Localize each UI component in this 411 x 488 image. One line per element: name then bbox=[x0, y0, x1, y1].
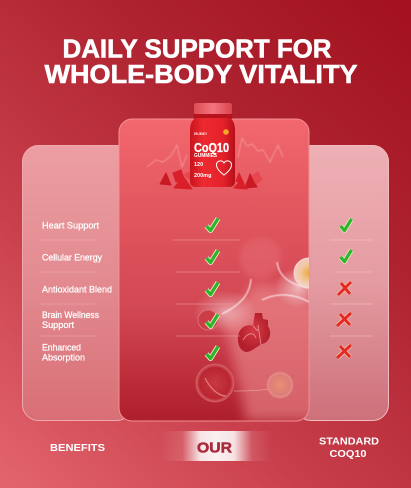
gummies right bbox=[234, 172, 262, 189]
orb: small near check bbox=[198, 310, 218, 330]
dosage: 200mg bbox=[194, 173, 211, 179]
heartbeat line left bbox=[147, 145, 187, 167]
human body illustration bbox=[196, 239, 309, 420]
benefit labels: Support bbox=[42, 320, 74, 330]
orb: lower right bbox=[267, 372, 293, 398]
cross row 4 bbox=[337, 313, 351, 326]
title bbox=[44, 34, 358, 89]
title: DAILY SUPPORT FOR bbox=[62, 34, 332, 64]
orb: upper right bbox=[294, 258, 309, 288]
check row 2 bbox=[340, 250, 352, 262]
orb: large lower bbox=[196, 364, 234, 402]
center dividers bbox=[172, 240, 240, 336]
connector line bbox=[234, 389, 268, 391]
highlight band: our bbox=[160, 431, 272, 461]
panel: standard CoQ10 column bbox=[295, 146, 388, 420]
count: 120 bbox=[194, 162, 203, 168]
benefit labels: Brain Wellness bbox=[42, 310, 99, 320]
cross row 3 bbox=[338, 282, 351, 295]
column label: standard coq10 bbox=[319, 436, 379, 460]
heart icon bbox=[216, 161, 232, 175]
check row 5 bbox=[206, 346, 218, 358]
standard column marks bbox=[337, 219, 352, 358]
benefit labels: Heart Support bbox=[42, 220, 100, 230]
check row 1 bbox=[340, 219, 352, 230]
column label: standard coq10: STANDARD bbox=[319, 436, 379, 448]
benefit labels: Antioxidant Blend bbox=[42, 284, 112, 294]
check row 4 bbox=[206, 314, 218, 326]
shoulder glow right bbox=[276, 270, 309, 306]
check row 1 bbox=[206, 218, 218, 230]
torso bbox=[222, 285, 320, 421]
glowing neck and collar lines bbox=[222, 262, 309, 314]
column label: our: OUR bbox=[197, 440, 232, 456]
right dividers bbox=[330, 240, 373, 336]
gummies left bbox=[160, 170, 192, 189]
column label: benefits: BENEFITS bbox=[50, 442, 105, 454]
column label: standard coq10: COQ10 bbox=[330, 448, 367, 460]
left dividers bbox=[40, 240, 96, 336]
chest glow left bbox=[196, 292, 252, 332]
check row 3 bbox=[206, 282, 218, 294]
product bottle bbox=[190, 103, 235, 187]
panel: our column bbox=[119, 119, 324, 421]
benefit labels: Absorption bbox=[42, 352, 85, 362]
heart organ bbox=[238, 313, 270, 352]
product name: CoQ10 bbox=[194, 141, 229, 155]
brand text: DR.JENCY bbox=[194, 132, 207, 136]
benefit labels bbox=[42, 220, 112, 362]
heartbeat line right bbox=[238, 138, 283, 162]
panel: benefits column bbox=[22, 146, 132, 420]
cross row 5 bbox=[337, 345, 351, 358]
benefit labels: Enhanced bbox=[42, 342, 81, 352]
benefit labels: Cellular Energy bbox=[42, 252, 102, 262]
head bbox=[240, 238, 281, 278]
product bottle: GUMMIES bbox=[194, 153, 218, 159]
check row 2 bbox=[206, 250, 218, 262]
brand seal bbox=[223, 129, 229, 135]
check marks bbox=[206, 218, 218, 358]
title: WHOLE-BODY VITALITY bbox=[44, 59, 358, 89]
